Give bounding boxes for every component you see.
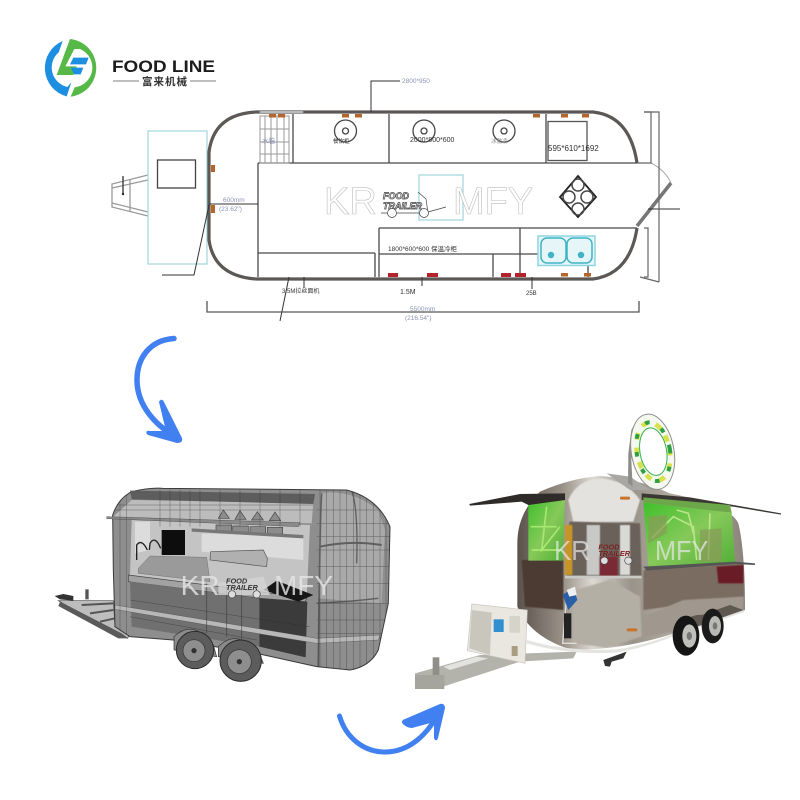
- food trailer logo on wireframe: FOOD: [226, 576, 248, 585]
- wireframe body: [113, 488, 390, 670]
- wireframe tow hitch: [55, 589, 130, 638]
- food trailer logo on wireframe: TRAILER: [226, 583, 258, 592]
- interior walls: [258, 114, 637, 277]
- hanging pots: [216, 510, 283, 534]
- front wheel: [673, 616, 699, 656]
- logo: [45, 39, 216, 97]
- food trailer logo on chrome trailer: TRAILER: [598, 549, 631, 558]
- right window dark fixtures: [648, 515, 722, 562]
- right window interior: [652, 510, 710, 560]
- lower reflections: [573, 580, 642, 647]
- food trailer logo on chrome trailer: [598, 542, 632, 564]
- plan annotations: 冰激凌: [491, 137, 508, 145]
- front wheel: [218, 639, 263, 681]
- plan annotations: 1800*600*600 保温冷柜: [388, 244, 458, 253]
- food trailer mini logo on plan: FOOD: [383, 191, 409, 201]
- double sink: [538, 236, 595, 266]
- watermark KR MFY on plan: [324, 181, 533, 223]
- trailer shell: [209, 112, 671, 279]
- plan dimension labels: (216.54"): [405, 315, 432, 322]
- jack wheel: [603, 652, 627, 667]
- front panel reflection: [567, 522, 642, 577]
- display case: [210, 550, 267, 567]
- plan dimension labels: (23.62"): [219, 206, 242, 213]
- rear wheel: [702, 609, 724, 643]
- watermark on chrome trailer: [554, 535, 709, 566]
- electrical sockets: [211, 114, 591, 276]
- food trailer mini logo on plan: TRAILER: [383, 201, 422, 211]
- logo mark: [45, 39, 96, 97]
- watermark on wireframe: MFY: [274, 570, 333, 601]
- left green window: [528, 500, 565, 561]
- brand name: FOOD LINE: [112, 58, 215, 76]
- hose and blue handle: [563, 587, 577, 643]
- floor plan drawing: [112, 78, 680, 322]
- lower side panel: [130, 582, 259, 647]
- counter ledge: [643, 562, 755, 571]
- orange markers: [620, 497, 637, 631]
- plan annotations: [282, 137, 599, 297]
- dark door panel: [259, 598, 307, 657]
- waist rail: [565, 576, 642, 578]
- colored front stripes: [565, 525, 630, 577]
- tow bar: [415, 652, 577, 689]
- food trailer mini logo on plan: [381, 191, 446, 218]
- brand subtitle: 富来机械: [142, 75, 188, 88]
- serving window interior: [130, 520, 310, 598]
- overall length dimension: [207, 301, 639, 312]
- food trailer logo on wireframe: [218, 576, 270, 598]
- leader lines: [162, 81, 680, 321]
- AC unit: [467, 604, 527, 663]
- right green window: [643, 503, 735, 567]
- hatch window: [158, 160, 196, 188]
- plan annotations: 餐饮柜: [333, 137, 350, 145]
- curved arrow: wireframe to finished trailer: [340, 704, 445, 752]
- watermark on chrome trailer: MFY: [655, 535, 709, 566]
- service hatch outline: [148, 131, 207, 264]
- right dimension lines: [637, 112, 659, 282]
- plan annotations: 3.5M拉丝面机: [282, 287, 319, 295]
- left awning: [469, 493, 565, 506]
- right awning: [642, 493, 781, 515]
- counter top: [128, 575, 307, 602]
- food trailer logo on chrome trailer: FOOD: [598, 542, 620, 551]
- front dome highlight: [568, 478, 640, 522]
- left window neon frame: [531, 507, 562, 550]
- appliance box: [548, 122, 587, 160]
- plan annotations: 25B: [526, 291, 537, 297]
- window back panels: [135, 522, 303, 560]
- dark waistline reflections: [522, 560, 563, 610]
- wireframe mesh lines: [113, 490, 390, 670]
- rear wheel: [174, 629, 217, 669]
- wireframe 3D trailer: [55, 488, 390, 681]
- storage rack: [260, 110, 303, 163]
- plan annotations: 1.5M: [400, 289, 416, 296]
- watermark KR MFY on plan: KR: [324, 181, 377, 223]
- finished chrome trailer: [415, 411, 781, 689]
- burner circles: [334, 120, 515, 142]
- rear wheel arch: [673, 605, 743, 640]
- plan annotations: 595*610*1692: [548, 144, 599, 153]
- shelf: [192, 528, 303, 538]
- upper window glazing: [113, 500, 313, 523]
- tow hitch: [112, 175, 148, 216]
- chassis skirt: [527, 610, 744, 653]
- plan dimension labels: 5500mm: [410, 306, 435, 313]
- plan dimension labels: [219, 78, 435, 322]
- black appliance: [162, 530, 185, 555]
- chrome body: [517, 476, 745, 650]
- plan dimension labels: 600mm: [223, 197, 245, 204]
- red outlets: [388, 273, 526, 277]
- sign pole: [628, 425, 634, 487]
- brand subtitle: [113, 75, 216, 88]
- watermark on chrome trailer: KR: [554, 535, 590, 566]
- roof vent: [607, 473, 650, 490]
- floor drain square: [419, 175, 463, 220]
- plan dimension labels: 水箱: [262, 136, 276, 145]
- awning bar: [130, 491, 315, 504]
- round sign: [625, 411, 680, 493]
- faucets: [137, 540, 161, 560]
- black counter item: [263, 581, 313, 602]
- diamond four-burner stove: [560, 176, 596, 217]
- plan dimension labels: 2800*950: [402, 78, 430, 85]
- curved arrow: plan to wireframe: [137, 338, 182, 443]
- watermark on wireframe: [181, 570, 333, 601]
- counter glass: [138, 556, 210, 582]
- watermark KR MFY on plan: MFY: [453, 181, 533, 223]
- watermark on wireframe: KR: [181, 570, 220, 601]
- wireframe upper dome: [318, 492, 385, 603]
- serving hatch rail: [107, 517, 300, 527]
- plan annotations: 2000*800*600: [410, 137, 454, 144]
- green underside of awning: [643, 497, 732, 513]
- chrome trim strip: [115, 605, 380, 643]
